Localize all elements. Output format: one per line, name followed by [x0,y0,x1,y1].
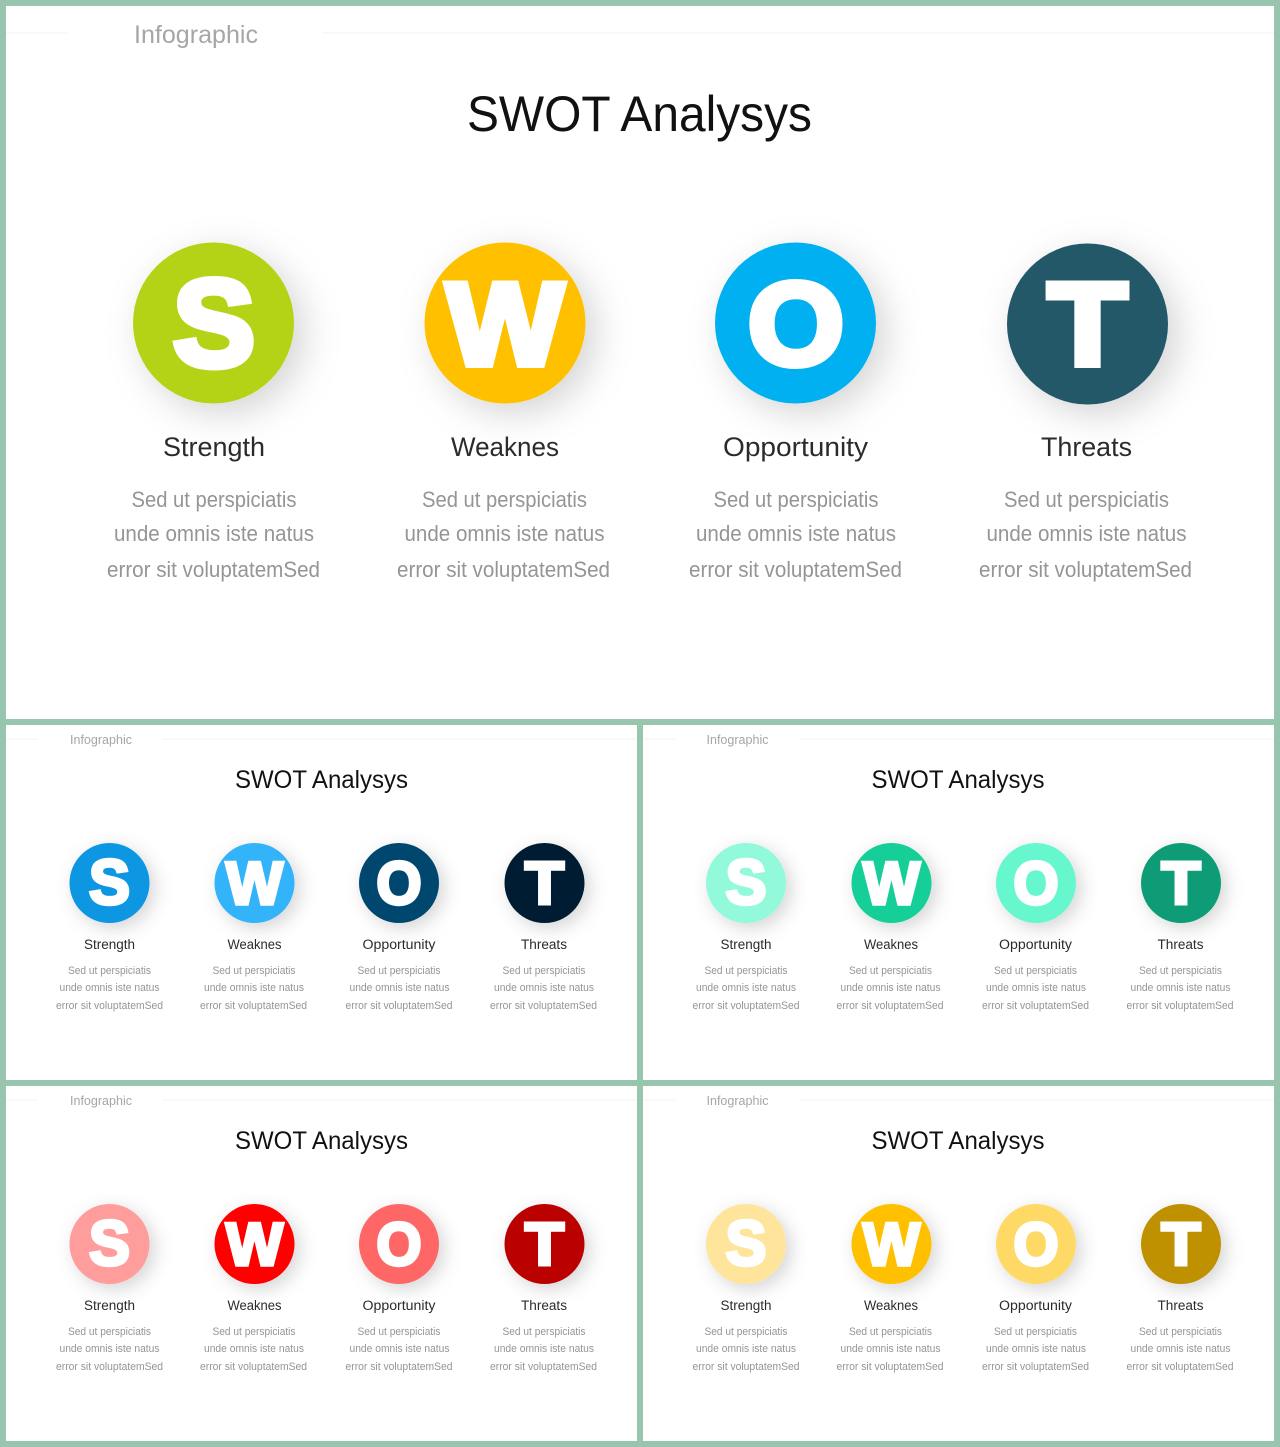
panel: SWOT gold [643,1086,1274,1441]
header label: Infographic [706,1094,768,1108]
item: Weaknes: unde omnis iste natus [204,982,304,994]
item: Opportunity [346,843,453,1012]
item: Weaknes: error sit voluptatemSed [836,1361,944,1373]
item: Strength [692,1204,800,1373]
item: Threats: T [525,850,564,917]
item: Strength: Sed ut perspiciatis [704,965,788,977]
item: Opportunity: unde omnis iste natus [986,1343,1086,1355]
item: Weaknes: unde omnis iste natus [840,1343,940,1355]
item: Weaknes [397,242,610,582]
item: Weaknes: Weaknes [864,1298,918,1313]
item: Opportunity: error sit voluptatemSed [689,557,902,582]
item: Strength: Sed ut perspiciatis [68,965,151,977]
item: Weaknes: error sit voluptatemSed [200,1361,307,1373]
item: Threats [490,843,597,1012]
title: SWOT Analysys [467,86,812,142]
item: Weaknes [836,843,944,1012]
item: Strength: error sit voluptatemSed [56,1000,163,1012]
item: Weaknes: error sit voluptatemSed [836,1000,944,1012]
item: Strength: Strength [84,1298,135,1313]
item: Threats: Threats [1158,937,1204,952]
item: Strength: Sed ut perspiciatis [132,487,296,512]
item: Threats: Sed ut perspiciatis [1004,487,1169,512]
item: Weaknes: Sed ut perspiciatis [422,487,587,512]
item: Opportunity: error sit voluptatemSed [346,1000,453,1012]
item: Threats: Threats [521,937,567,952]
item: Opportunity: Sed ut perspiciatis [358,1326,440,1338]
item: Weaknes [836,1204,944,1373]
item: Strength: unde omnis iste natus [696,1343,796,1355]
item: Threats: error sit voluptatemSed [490,1361,597,1373]
item: Opportunity: O [1014,850,1058,917]
item: Weaknes: W [226,1211,283,1278]
item: Opportunity: unde omnis iste natus [350,1343,450,1355]
item: Threats: T [525,1211,564,1278]
item: Opportunity: Opportunity [723,432,869,462]
item: Opportunity [982,1204,1089,1373]
item: Strength [56,1204,163,1373]
item: Weaknes: W [863,1211,920,1278]
item: Weaknes: W [446,258,564,390]
item: Strength: Strength [84,937,135,952]
item: Weaknes: Sed ut perspiciatis [849,1326,932,1338]
item: Weaknes: Sed ut perspiciatis [212,1326,296,1338]
item: Opportunity: Opportunity [999,937,1072,952]
item: Opportunity: error sit voluptatemSed [346,1361,453,1373]
item: Strength: unde omnis iste natus [114,521,314,546]
item: Threats: error sit voluptatemSed [1126,1361,1234,1373]
title: SWOT Analysys [872,766,1044,794]
item: Opportunity: O [376,850,422,917]
item: Weaknes: Sed ut perspiciatis [212,965,296,977]
item: Strength: unde omnis iste natus [60,982,160,994]
panel: main SWOT green [6,6,1274,719]
item: Opportunity: unde omnis iste natus [696,521,896,546]
item: Opportunity [982,843,1089,1012]
item: Opportunity: error sit voluptatemSed [982,1000,1089,1012]
item: Threats: unde omnis iste natus [986,521,1186,546]
item: Threats: error sit voluptatemSed [1126,1000,1234,1012]
item: Opportunity: O [748,258,844,390]
header label: Infographic [134,21,258,49]
item: Weaknes: unde omnis iste natus [404,521,604,546]
item: Threats: error sit voluptatemSed [490,1000,597,1012]
panel: SWOT blue [6,725,637,1080]
item: Strength: error sit voluptatemSed [56,1361,163,1373]
item: Weaknes: unde omnis iste natus [840,982,940,994]
item: Threats: Sed ut perspiciatis [1139,965,1222,977]
title: SWOT Analysys [872,1127,1044,1155]
item: Weaknes: Weaknes [864,937,918,952]
item: Weaknes: error sit voluptatemSed [397,557,610,582]
item: Threats: Threats [1158,1298,1204,1313]
item: Strength [56,843,163,1012]
item: Threats: unde omnis iste natus [494,1343,594,1355]
item: Weaknes: unde omnis iste natus [204,1343,304,1355]
item: Strength: S [89,848,130,918]
item: Strength: S [173,256,255,393]
panel: SWOT mint [643,725,1274,1080]
item: Threats: T [1162,1211,1200,1278]
item: Weaknes: Weaknes [228,1298,282,1313]
item: Threats: error sit voluptatemSed [979,557,1192,582]
title: SWOT Analysys [235,1127,408,1155]
item: Opportunity: error sit voluptatemSed [982,1361,1089,1373]
item: Strength: error sit voluptatemSed [107,557,320,582]
item: Weaknes [200,1204,307,1373]
item: Strength: Strength [163,432,265,462]
item: Strength: S [89,1209,130,1279]
item: Opportunity: Sed ut perspiciatis [714,487,878,512]
item: Weaknes: W [863,850,920,917]
item: Opportunity: Opportunity [999,1298,1072,1313]
item: Opportunity: O [376,1211,422,1278]
title: SWOT Analysys [235,766,408,794]
item: Opportunity: Sed ut perspiciatis [358,965,440,977]
item: Weaknes: W [226,850,283,917]
item: Threats: Threats [521,1298,567,1313]
item: Weaknes [200,843,307,1012]
item: Threats [1126,1204,1234,1373]
item: Threats: Sed ut perspiciatis [502,1326,586,1338]
item: Opportunity: Sed ut perspiciatis [994,965,1077,977]
item: Threats: Sed ut perspiciatis [1139,1326,1222,1338]
item: Opportunity: unde omnis iste natus [350,982,450,994]
item: Opportunity: Opportunity [362,1298,436,1313]
item: Strength: Strength [720,937,772,952]
header label: Infographic [70,1094,132,1108]
item: Threats [979,244,1192,582]
item: Weaknes: error sit voluptatemSed [200,1000,307,1012]
item: Opportunity: Sed ut perspiciatis [994,1326,1077,1338]
item: Weaknes: Sed ut perspiciatis [849,965,932,977]
item: Opportunity: unde omnis iste natus [986,982,1086,994]
item: Threats: Threats [1041,432,1132,462]
item: Threats: T [1162,850,1200,917]
header label: Infographic [706,733,768,747]
item: Strength [107,242,320,582]
item: Strength [692,843,800,1012]
item: Opportunity [689,242,902,582]
item: Threats: T [1048,258,1127,390]
panel: SWOT red [6,1086,637,1441]
item: Threats: unde omnis iste natus [494,982,594,994]
item: Strength: Strength [720,1298,772,1313]
item: Strength: Sed ut perspiciatis [68,1326,151,1338]
item: Strength: unde omnis iste natus [60,1343,160,1355]
item: Strength: unde omnis iste natus [696,982,796,994]
item: Threats [490,1204,597,1373]
item: Strength: Sed ut perspiciatis [704,1326,788,1338]
item: Weaknes: Weaknes [228,937,282,952]
item: Weaknes: Weaknes [451,432,559,462]
header label: Infographic [70,733,132,747]
item: Strength: error sit voluptatemSed [692,1361,800,1373]
item: Strength: S [726,1209,766,1279]
item: Opportunity [346,1204,453,1373]
item: Threats: Sed ut perspiciatis [502,965,586,977]
item: Threats [1126,843,1234,1012]
item: Opportunity: O [1014,1211,1058,1278]
item: Threats: unde omnis iste natus [1130,982,1230,994]
item: Strength: error sit voluptatemSed [692,1000,800,1012]
item: Strength: S [726,848,766,918]
item: Opportunity: Opportunity [362,937,436,952]
item: Threats: unde omnis iste natus [1130,1343,1230,1355]
